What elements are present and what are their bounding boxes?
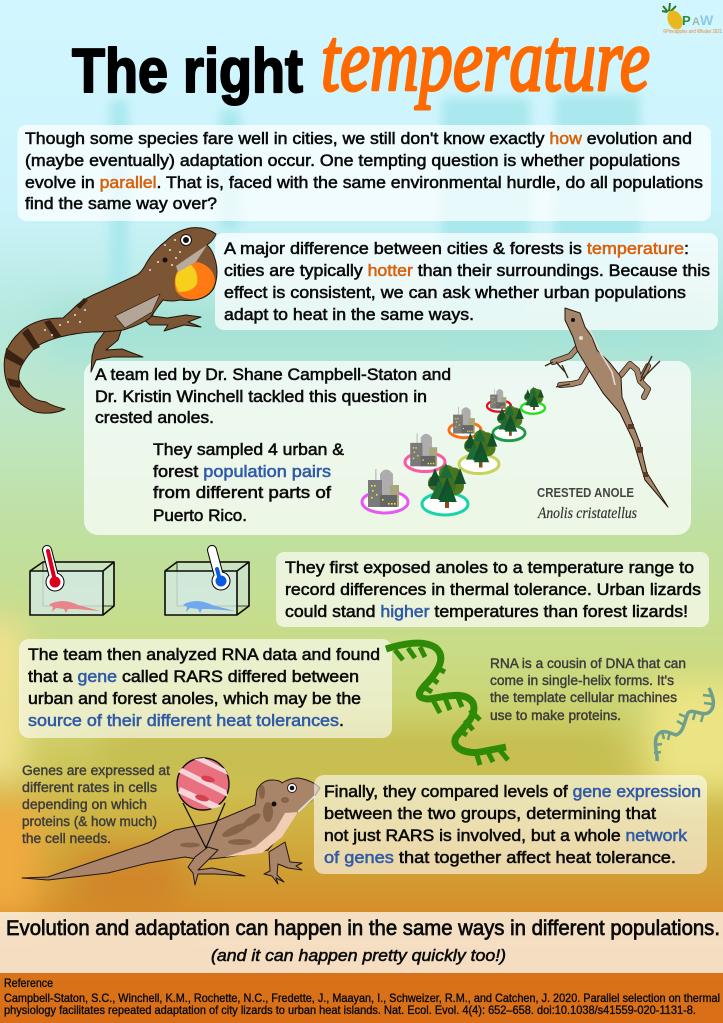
- forest site green: [493, 404, 525, 441]
- icon: forest tank with cool thermometer: [165, 550, 249, 615]
- RNA note: the template cellular machines: [490, 690, 677, 705]
- panel: gene expression: between the two groups, determining that: [324, 804, 656, 823]
- species label: CRESTED ANOLE: [537, 485, 634, 500]
- RNA note: come in single-helix forms. It's: [490, 673, 674, 688]
- panel: intro: evolve in parallel. That is, faced with the same environmental hurdle, do all populations: [25, 173, 703, 192]
- panel: temperature difference: [215, 233, 718, 330]
- icon: large RNA strand: [386, 643, 508, 765]
- logo: W: [700, 12, 714, 28]
- title: [72, 11, 650, 110]
- panel: RNA analysis: source of their different heat tolerances .: [28, 711, 344, 730]
- gene expression note: [22, 763, 170, 846]
- panel: RNA analysis: The team then analyzed RNA data and found: [28, 645, 380, 664]
- panel: team and sampling: crested anoles.: [95, 408, 214, 427]
- species label: [537, 485, 637, 522]
- icon: pale brown anole: [22, 778, 320, 885]
- panel: gene expression: of genes that together affect heat tolerance.: [324, 848, 676, 867]
- icon: crested anole from above: [545, 308, 668, 507]
- city site red: [487, 389, 511, 412]
- panel: team and sampling: [84, 361, 691, 535]
- reference: [0, 973, 723, 1023]
- panel: intro: find the same way over?: [25, 194, 217, 213]
- panel: thermal tolerance: record differences in thermal tolerance. Urban lizards: [285, 580, 701, 599]
- gene expression note: depending on which: [22, 797, 147, 812]
- city site magenta: [362, 469, 408, 513]
- panel: team and sampling: from different parts of: [153, 483, 331, 502]
- icon: urban tank with hot thermometer: [30, 550, 114, 615]
- panel: team and sampling: Dr. Kristin Winchell tackled this question in: [95, 387, 427, 406]
- panel: gene expression: Finally, they compared levels of gene expression: [324, 782, 701, 801]
- panel: temperature difference: adapt to heat in the same ways.: [224, 305, 474, 324]
- forest site teal: [422, 463, 468, 515]
- panel: intro: (maybe eventually) adaptation occur. One tempting question is whether populations: [25, 151, 680, 170]
- RNA note: [490, 656, 686, 723]
- panel: gene expression: not just RARS is involved, but a whole network: [324, 826, 688, 845]
- gene expression note: proteins (& how much): [22, 814, 157, 829]
- RNA note: use to make proteins.: [490, 708, 621, 723]
- city site pink: [405, 433, 445, 472]
- reference: Reference: [4, 976, 53, 990]
- title: The right: [72, 37, 303, 106]
- city site orange: [449, 407, 481, 438]
- logo: [662, 3, 722, 35]
- conclusion banner: Evolution and adaptation can happen in the same ways in different populations.: [6, 917, 720, 940]
- panel: temperature difference: cities are typically hotter than their surroundings. Because this: [224, 261, 710, 280]
- panel: temperature difference: effect is consistent, we can ask whether urban populations: [224, 283, 686, 302]
- forest site olive: [459, 428, 499, 474]
- RNA note: RNA is a cousin of DNA that can: [490, 656, 686, 671]
- logo: A: [692, 16, 700, 28]
- conclusion banner: (and it can happen pretty quickly too!): [211, 946, 506, 965]
- forest site lime: [521, 387, 545, 414]
- panel: thermal tolerance: [276, 552, 709, 627]
- panel: temperature difference: A major difference between cities & forests is temperature :: [224, 239, 689, 258]
- conclusion banner: [0, 912, 723, 973]
- icon: brown anole with orange dewlap: [4, 228, 217, 413]
- panel: RNA analysis: that a gene called RARS differed between: [28, 667, 359, 686]
- logo: P: [682, 13, 691, 28]
- icon: cell magnifier: [177, 758, 229, 848]
- panel: thermal tolerance: They first exposed anoles to a temperature range to: [285, 558, 694, 577]
- gene expression note: Genes are expressed at: [22, 763, 170, 778]
- panel: intro: [18, 125, 711, 221]
- icon: small RNA strand: [654, 688, 713, 761]
- panel: thermal tolerance: could stand higher temperatures than forest lizards!: [285, 602, 688, 621]
- panel: RNA analysis: [19, 639, 392, 738]
- panel: intro: Though some species fare well in cities, we still don't know exactly how evolution and: [25, 129, 692, 148]
- icon: four urban and forest site pairs: [362, 387, 545, 515]
- panel: team and sampling: They sampled 4 urban &: [153, 440, 345, 459]
- gene expression note: different rates in cells: [22, 780, 157, 795]
- panel: team and sampling: Puerto Rico.: [153, 506, 247, 525]
- species label: Anolis cristatellus: [537, 505, 637, 522]
- panel: gene expression: [314, 775, 707, 874]
- gene expression note: the cell needs.: [22, 831, 111, 846]
- panel: team and sampling: A team led by Dr. Shane Campbell-Staton and: [95, 365, 451, 384]
- panel: team and sampling: forest population pairs: [153, 462, 331, 481]
- panel: RNA analysis: urban and forest anoles, which may be the: [28, 689, 361, 708]
